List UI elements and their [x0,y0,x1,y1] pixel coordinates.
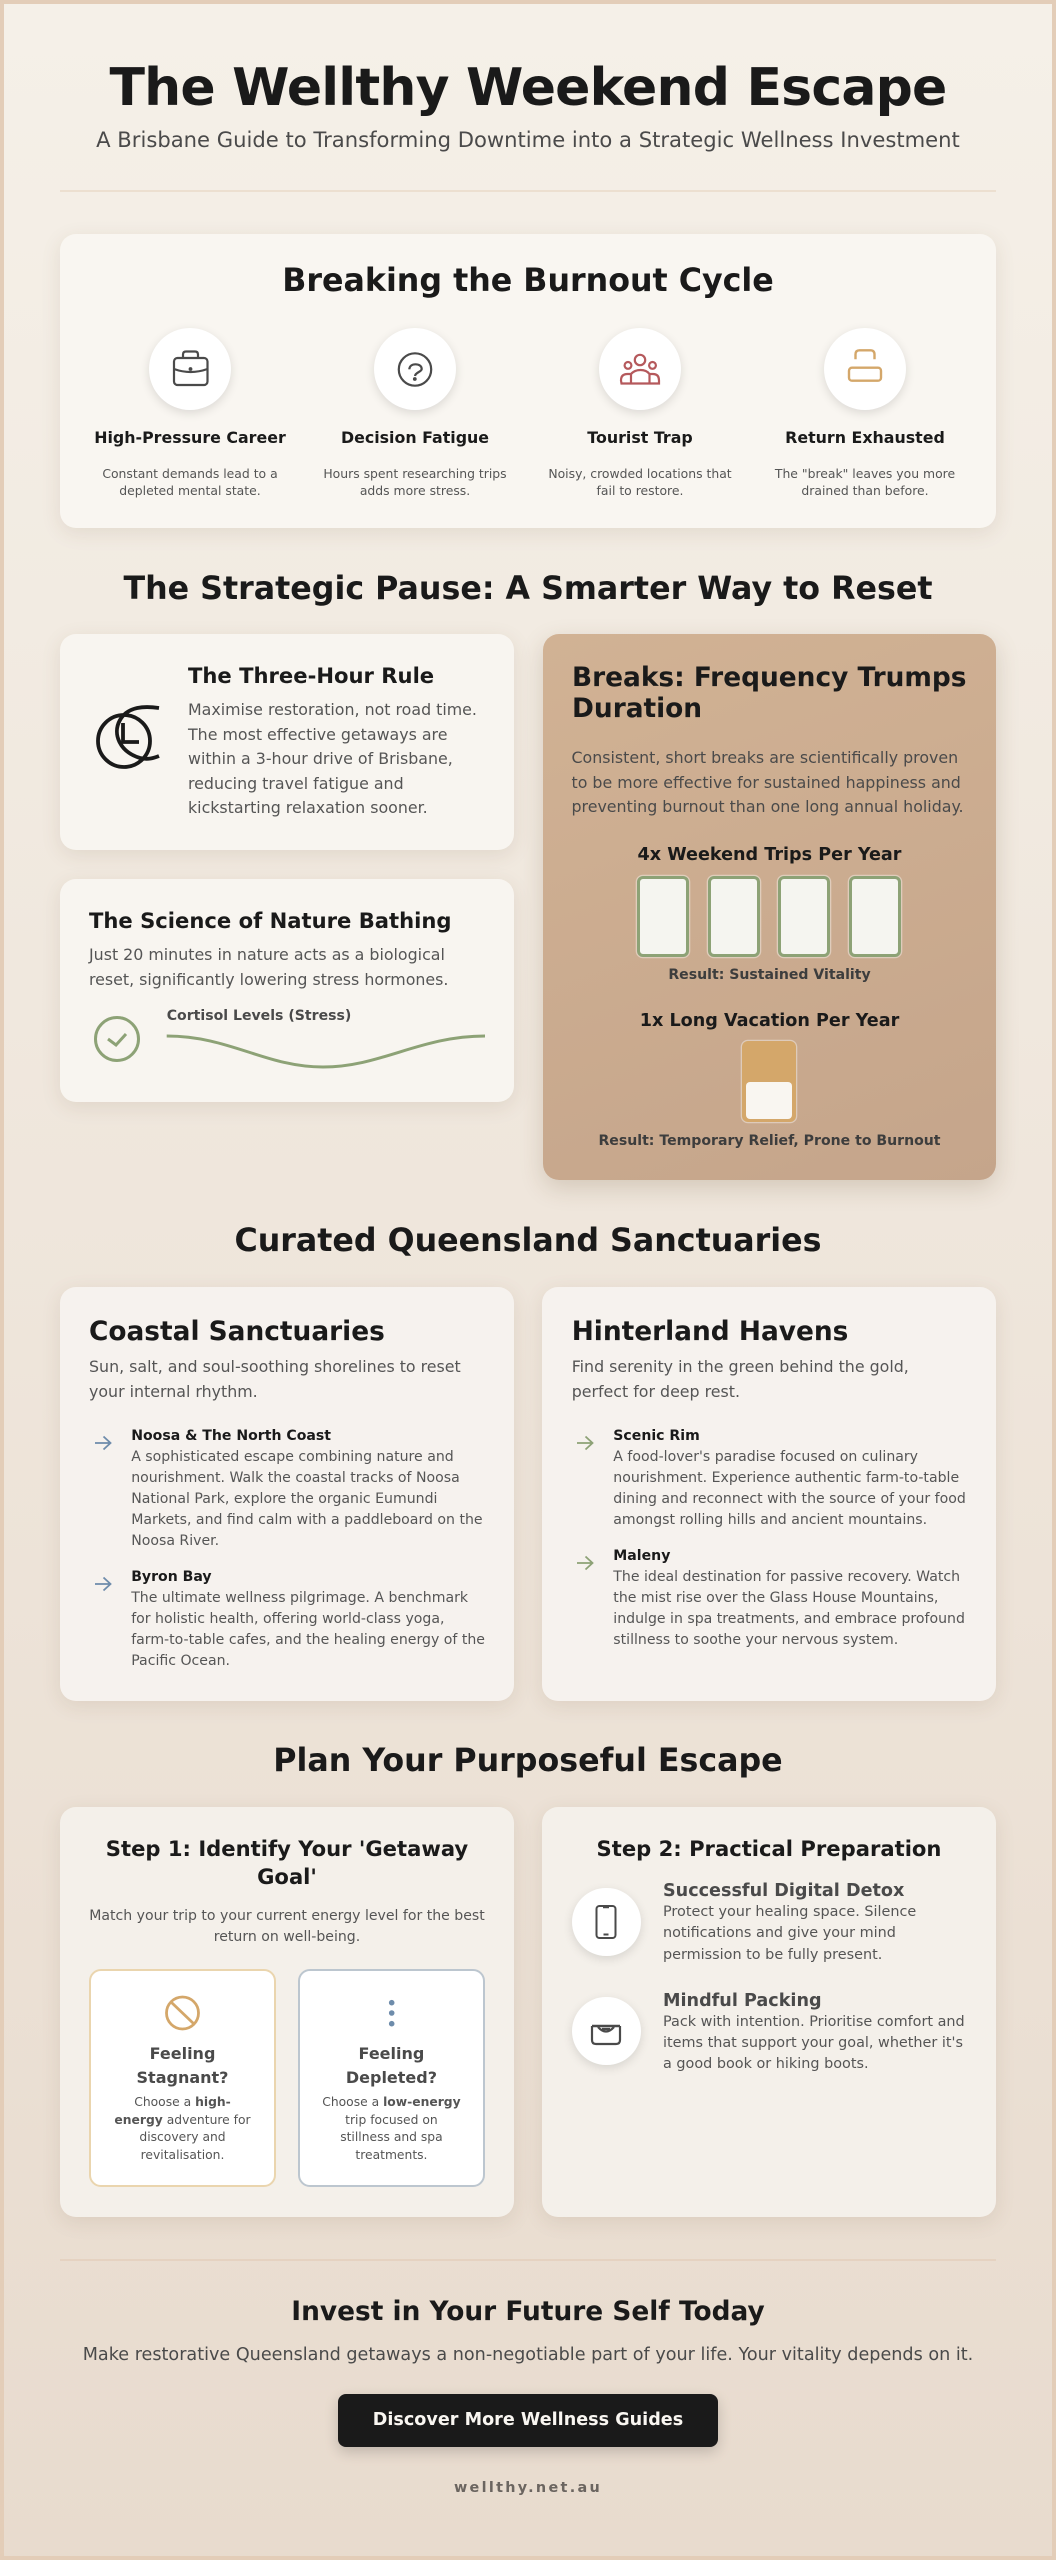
icon: packing tray [572,1997,641,2065]
body text: kickstarting relaxation sooner. [188,798,428,817]
depleted remainder [746,1082,792,1119]
title: Hinterland Havens [572,1316,848,1347]
option text: trip focused on [345,2113,438,2127]
option: feeling depleted [298,1969,485,2187]
panel: coastal sanctuaries [60,1287,514,1701]
body text: preventing burnout than one long annual holiday. [572,797,964,816]
panel: the science of nature bathing [60,879,514,1102]
panel: breaking the burnout cycle [60,234,996,528]
footer heading: Invest in Your Future Self Today [291,2296,765,2327]
description [774,466,955,498]
place: scenic rim [613,1428,966,1528]
description: drained than before. [801,483,929,498]
icon: depleted battery [824,328,906,410]
title: The Wellthy Weekend Escape [109,58,947,118]
option text: treatments. [355,2148,427,2162]
icon: check circle [94,1016,140,1062]
description: Noisy, crowded locations that [548,466,732,480]
body text: The most effective getaways are [188,725,447,744]
intro: Match your trip to your current energy level for the best [89,1908,485,1924]
label: Tourist Trap [587,428,693,447]
description: adds more stress. [360,483,470,498]
body text: Consistent, short breaks are scientifically proven [572,748,958,767]
chart: cortisol curve [166,1034,485,1068]
place name: Scenic Rim [613,1428,700,1444]
label: Return Exhausted [785,428,945,447]
arrow [577,1436,594,1450]
item: high-pressure career [94,328,286,498]
icon: no sign [165,1996,200,2030]
place description: Markets, and find calm with a paddleboard on the [131,1512,483,1528]
body text [572,748,964,816]
website link: wellthy.net.au [454,2480,602,2496]
description: Hours spent researching trips [323,466,507,480]
trip 3 [778,876,830,957]
description [548,466,732,498]
place description: nourishment. Experience authentic farm-to-table [613,1470,959,1486]
title: The Science of Nature Bathing [89,908,452,933]
intro [89,1357,461,1400]
description [323,466,507,498]
body text: reset, significantly lowering stress hormones. [89,970,448,989]
tip text: Pack with intention. Prioritise comfort and [663,2014,965,2030]
tip text [663,1904,916,1963]
option title: Feeling [150,2044,215,2062]
place description [131,1448,483,1549]
option title [346,2044,437,2087]
title: Coastal Sanctuaries [89,1316,385,1347]
title: Step 2: Practical Preparation [597,1836,941,1861]
trip 2 [708,876,760,957]
place name: Byron Bay [131,1569,212,1585]
arrow [95,1436,112,1450]
title: Goal' [257,1864,317,1889]
place description [613,1568,965,1648]
button: discover more: Discover More Wellness Guides [373,2410,683,2430]
icon: question mark [374,328,456,410]
chart: one long vacation [742,1041,796,1122]
panel: step 1 [60,1807,514,2217]
place description: A food-lover's paradise focused on culinary [613,1448,918,1464]
intro: return on well-being. [214,1929,360,1945]
body text: Just 20 minutes in nature acts as a biological [89,945,445,964]
description: depleted mental state. [119,483,261,498]
panel: step 2 [542,1807,996,2217]
place description: stillness to soothe your nervous system. [613,1632,898,1648]
place name: Noosa & The North Coast [131,1428,331,1444]
place: maleny [613,1548,965,1648]
option title: Feeling [359,2044,424,2062]
item: decision fatigue [323,328,507,498]
heading: curated queensland sanctuaries: Curated Queensland Sanctuaries [234,1222,822,1258]
icon: phone [572,1888,641,1956]
body text [88,945,448,989]
body text [188,700,477,817]
intro [572,1357,909,1400]
body text: to be more effective for sustained happiness and [572,773,961,792]
title: The Three-Hour Rule [188,663,434,688]
cortisol label: Cortisol Levels (Stress) [167,1008,351,1024]
tip text [663,2012,965,2075]
icon: briefcase [149,328,231,410]
option text: discovery and [139,2130,226,2144]
title: Breaks: Frequency Trumps [572,662,966,693]
intro [89,1908,485,1945]
intro: perfect for deep rest. [572,1382,740,1400]
title: Duration [572,693,702,724]
subtitle: A Brisbane Guide to Transforming Downtime into a Strategic Wellness Investment [96,127,960,152]
result: temporary relief: Result: Temporary Relief, Prone to Burnout [598,1133,941,1149]
place description: Noosa River. [131,1533,219,1549]
tip text: a good book or hiking boots. [663,2056,869,2072]
option text [322,2095,461,2162]
body text: within a 3-hour drive of Brisbane, [188,749,453,768]
place description: farm-to-table cafes, and the healing energy of the [131,1632,485,1648]
intro: your internal rhythm. [89,1382,258,1400]
place description: amongst rolling hills and ancient mountains. [613,1512,927,1528]
trip 1 [637,876,689,957]
heading: the strategic pause: The Strategic Pause: A Smarter Way to Reset [123,570,932,606]
intro: Sun, salt, and soul-soothing shorelines to reset [89,1357,461,1376]
panel: the three-hour rule [60,634,514,850]
heading: plan your purposeful escape: Plan Your Purposeful Escape [273,1742,783,1778]
place name: Maleny [613,1548,670,1564]
place description: the mist rise over the Glass House Mountains, [613,1590,938,1606]
tip text: notifications and give your mind [663,1925,896,1941]
panel: hinterland havens [542,1287,996,1701]
description: fail to restore. [597,483,683,498]
option text: energy adventure for [114,2113,251,2127]
trip 4 [849,876,901,957]
label: weekend trips: 4x Weekend Trips Per Year [638,845,901,865]
result: sustained vitality: Result: Sustained Vitality [668,967,871,983]
description: The "break" leaves you more [775,466,955,480]
option text: revitalisation. [141,2148,224,2162]
label: Decision Fatigue [341,428,489,447]
chart: four weekend trips [636,874,902,958]
tip: digital detox [570,1881,916,1963]
place description: The ultimate wellness pilgrimage. A benchmark [131,1590,468,1606]
button: discover more [338,2394,718,2447]
place description: A sophisticated escape combining nature and [131,1448,454,1464]
tip title: Mindful Packing [663,1990,822,2010]
option text: Choose a high- [134,2095,231,2109]
option title [137,2044,228,2087]
heading: burnout cycle: Breaking the Burnout Cycle [282,262,774,298]
option: feeling stagnant [89,1969,276,2187]
place: noosa [131,1428,483,1549]
place description: nourishment. Walk the coastal tracks of Noosa [131,1470,460,1486]
item: tourist trap [548,328,732,498]
item: return exhausted [774,328,955,498]
arrow [95,1576,112,1592]
tip text: Protect your healing space. Silence [663,1904,916,1920]
intro: Find serenity in the green behind the gold, [572,1357,909,1376]
option title: Stagnant? [137,2068,228,2087]
tip text: items that support your goal, whether it's [663,2035,963,2051]
body text: Maximise restoration, not road time. [188,700,477,719]
place description: dining and reconnect with the source of your food [613,1491,966,1507]
place description [131,1590,485,1669]
title [106,1836,468,1889]
place description [613,1448,966,1528]
place description: for holistic health, offering world-class yoga, [131,1611,444,1627]
tip title: Successful Digital Detox [663,1881,904,1901]
place description: National Park, explore the organic Eumundi [131,1491,437,1507]
place description: The ideal destination for passive recovery. Watch [613,1568,960,1584]
footer text: Make restorative Queensland getaways a non-negotiable part of your life. Your vitality depends on it. [83,2345,973,2365]
place: byron bay [131,1569,485,1669]
arrow [577,1556,594,1570]
option text: Choose a low-energy [322,2095,461,2109]
icon: three dots [388,2000,394,2026]
tip text: permission to be fully present. [663,1947,882,1963]
title [572,662,966,724]
description: Constant demands lead to a [102,466,278,480]
tip: mindful packing [572,1988,982,2088]
label: long vacation: 1x Long Vacation Per Year [640,1011,899,1031]
option text: stillness and spa [340,2130,443,2144]
option text [114,2095,251,2162]
panel: breaks frequency trumps duration [543,634,996,1180]
label: High-Pressure Career [94,428,286,447]
place description: Pacific Ocean. [131,1653,230,1669]
title: Step 1: Identify Your 'Getaway [106,1836,468,1861]
body text: reducing travel fatigue and [188,774,404,793]
option title: Depleted? [346,2068,437,2087]
icon: clock [96,705,160,769]
description [102,466,278,498]
icon: crowd [599,328,681,410]
place description: indulge in spa treatments, and embrace profound [613,1611,965,1627]
